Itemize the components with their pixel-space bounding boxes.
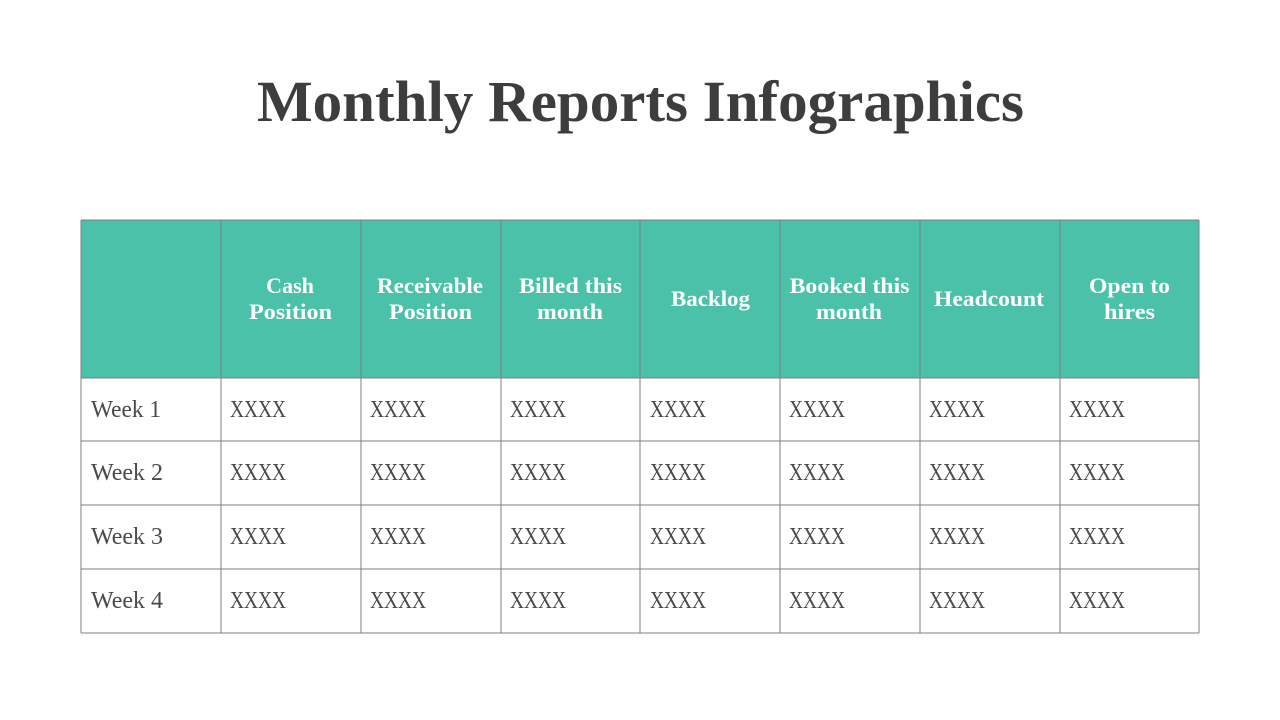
header: Receivable Position: Receivable: [377, 273, 483, 298]
row: Week 2: XXXX: [510, 460, 566, 486]
row: Week 2: XXXX: [789, 460, 845, 486]
row: Week 2: XXXX: [1069, 460, 1125, 486]
row: Week 1: XXXX: [1069, 397, 1125, 423]
row: Week 1: Week 1: [91, 397, 161, 423]
row: Week 4: XXXX: [510, 588, 566, 614]
row: Week 1: XXXX: [929, 397, 985, 423]
table: [81, 220, 1199, 633]
row: Week 4: XXXX: [370, 588, 426, 614]
header: Receivable Position: Position: [389, 299, 472, 324]
row: Week 2: XXXX: [929, 460, 985, 486]
row: Week 4: Week 4: [91, 588, 163, 614]
row: Week 3: XXXX: [510, 524, 566, 550]
header: Open to hires: Open to: [1089, 273, 1170, 298]
row: Week 3: XXXX: [230, 524, 286, 550]
header: Billed this month: month: [537, 299, 603, 324]
header: Booked this month: month: [816, 299, 882, 324]
row: Week 4: XXXX: [230, 588, 286, 614]
header: Billed this month: Billed this: [519, 273, 622, 298]
row: Week 2: [91, 460, 1125, 486]
row: Week 2: Week 2: [91, 460, 163, 486]
row: Week 3: XXXX: [650, 524, 706, 550]
row: Week 4: XXXX: [1069, 588, 1125, 614]
title: Monthly Reports Infographics: [257, 69, 1024, 134]
row: Week 3: [91, 524, 1125, 550]
row: Week 3: XXXX: [789, 524, 845, 550]
row: Week 2: XXXX: [230, 460, 286, 486]
row: Week 4: [91, 588, 1125, 614]
header: Booked this month: [790, 273, 910, 324]
header: Open to hires: hires: [1104, 299, 1155, 324]
row: Week 3: Week 3: [91, 524, 163, 550]
row: Week 4: XXXX: [929, 588, 985, 614]
header: Headcount: Headcount: [934, 286, 1045, 311]
row: Week 4: XXXX: [650, 588, 706, 614]
row: Week 1: XXXX: [650, 397, 706, 423]
header: Open to hires: [1089, 273, 1170, 324]
row: Week 2: XXXX: [370, 460, 426, 486]
row: Week 3: XXXX: [929, 524, 985, 550]
header: Cash Position: Cash: [266, 273, 314, 298]
table header band: [81, 220, 1199, 378]
row: Week 1: XXXX: [370, 397, 426, 423]
row: Week 3: XXXX: [1069, 524, 1125, 550]
row: Week 1: XXXX: [230, 397, 286, 423]
row: Week 3: XXXX: [370, 524, 426, 550]
row: Week 2: XXXX: [650, 460, 706, 486]
header: Receivable Position: [377, 273, 483, 324]
row: Week 1: XXXX: [789, 397, 845, 423]
header: Booked this month: Booked this: [790, 273, 910, 298]
header: Billed this month: [519, 273, 622, 324]
header: Backlog: Backlog: [671, 286, 750, 311]
header: Cash Position: [249, 273, 332, 324]
row: Week 1: XXXX: [510, 397, 566, 423]
header: Cash Position: Position: [249, 299, 332, 324]
row: Week 1: [91, 397, 1125, 423]
row: Week 4: XXXX: [789, 588, 845, 614]
